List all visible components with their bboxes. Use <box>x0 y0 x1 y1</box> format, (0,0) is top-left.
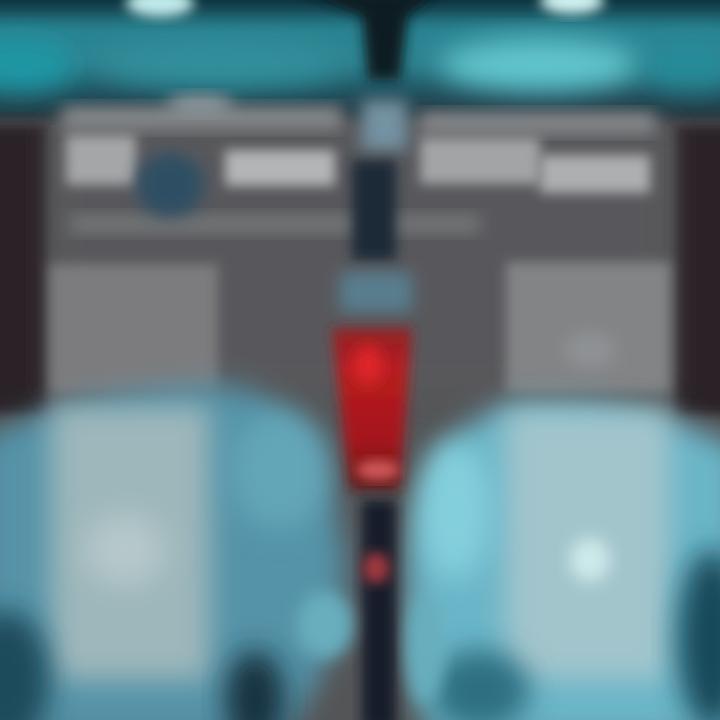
red bar <box>332 328 412 490</box>
red bar highlight <box>354 345 382 385</box>
panel: top teal band <box>0 0 720 120</box>
panel: dark side walls <box>0 125 720 415</box>
panel: upper right box <box>506 262 670 392</box>
teal shards <box>297 591 353 659</box>
lower dark stem <box>362 500 396 720</box>
panel: lower left blue shape <box>0 385 345 720</box>
blue collar <box>340 272 412 312</box>
top dark stem <box>300 0 440 80</box>
lower red spot <box>362 552 390 584</box>
dark stem segment <box>352 160 396 260</box>
panel: upper left box <box>50 264 218 392</box>
center column <box>297 0 443 720</box>
stem highlight <box>362 100 407 150</box>
heading: blurred title <box>62 94 655 234</box>
panel: middle grey wall <box>52 125 670 395</box>
panel: lower right blue shape <box>408 403 720 720</box>
red bar lower band <box>356 460 400 480</box>
